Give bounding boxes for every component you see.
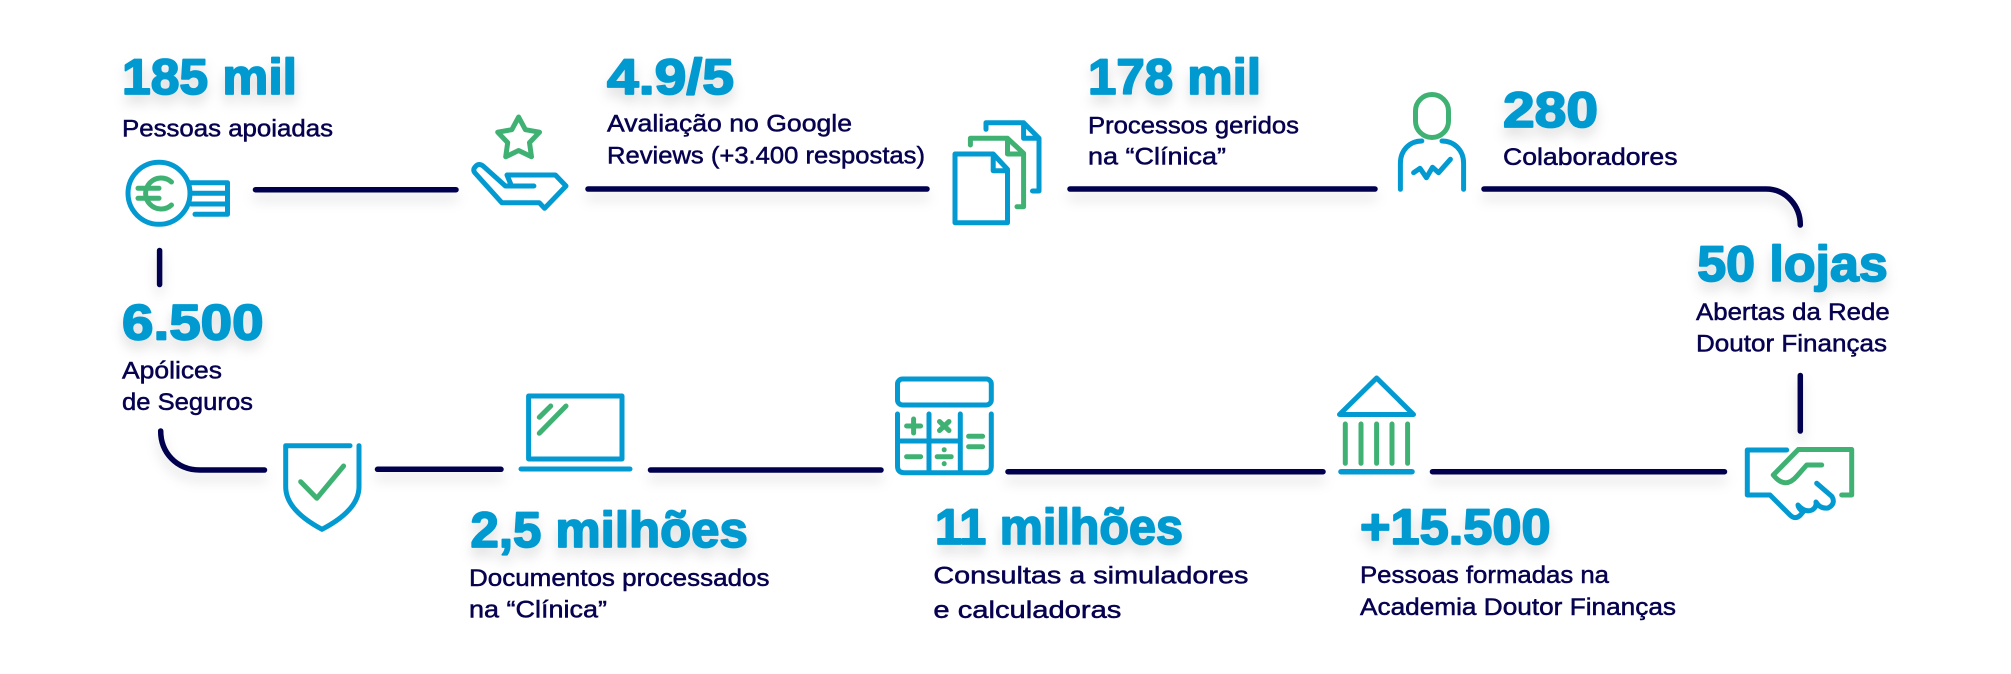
label: Consultas a simuladores: e calculadoras bbox=[933, 597, 1121, 624]
connector lines bbox=[160, 189, 1800, 472]
label: Apólices de Seguros: Apólices bbox=[122, 357, 222, 384]
heading: 4.9/5: 4.9/5 bbox=[607, 49, 734, 105]
icon: stacked documents bbox=[955, 123, 1039, 223]
heading: +15.500: +15.500 bbox=[1360, 499, 1551, 555]
stat: 50 lojas bbox=[1696, 236, 1890, 358]
icon: handshake bbox=[1747, 450, 1852, 518]
connector: staff to stores bbox=[1484, 189, 1800, 225]
label: Consultas a simuladores: Consultas a simuladores bbox=[933, 562, 1248, 589]
label: Pessoas apoiadas: Pessoas apoiadas bbox=[122, 116, 333, 143]
stat: 6.500 bbox=[122, 294, 264, 416]
connector: processes to staff bbox=[1070, 186, 1375, 192]
heading: 280: 280 bbox=[1503, 82, 1598, 138]
icon: hand with star bbox=[474, 117, 566, 208]
connector: shield to policies bbox=[161, 431, 264, 470]
heading: 2,5 milhões: 2,5 milhões bbox=[470, 502, 748, 558]
icon: laptop bbox=[521, 396, 630, 469]
connector: handshake to training bbox=[1432, 469, 1724, 474]
label: Documentos processados: Documentos processados bbox=[469, 565, 770, 592]
heading: 178 mil: 178 mil bbox=[1088, 49, 1261, 105]
icon: person with chart bbox=[1400, 94, 1464, 189]
stat: 11 milhões bbox=[933, 499, 1248, 624]
stat: 280 bbox=[1503, 82, 1678, 171]
heading: 185 mil: 185 mil bbox=[122, 49, 297, 105]
stat: 178 mil bbox=[1088, 49, 1299, 170]
stat: 4.9/5 bbox=[607, 49, 925, 169]
icon: bank bbox=[1340, 378, 1414, 472]
connector: reviews to processes bbox=[588, 186, 927, 192]
label: Pessoas formadas na Academia: Academia Doutor Finanças bbox=[1360, 594, 1676, 621]
label: Apólices de Seguros: de Seguros bbox=[122, 389, 253, 416]
label: Google Reviews: Avaliação no Google bbox=[607, 111, 852, 138]
label: Processos geridos: Processos geridos bbox=[1088, 112, 1299, 139]
label: Processos geridos: na “Clínica” bbox=[1088, 143, 1226, 170]
connector: laptop to shield bbox=[378, 467, 501, 472]
connector: stores to handshake bbox=[1798, 376, 1803, 431]
heading: 50 lojas: 50 lojas bbox=[1697, 236, 1888, 292]
icon: calculator bbox=[898, 379, 991, 473]
connector: bank to calculator bbox=[1008, 469, 1323, 474]
stat: 185 mil bbox=[122, 49, 333, 143]
label: Abertas da Rede Doutor Finanças: Abertas da Rede bbox=[1696, 299, 1890, 326]
heading: 6.500: 6.500 bbox=[122, 294, 264, 350]
label: Documentos processados: na “Clínica” bbox=[469, 596, 607, 623]
label: Pessoas formadas na Academia: Pessoas formadas na bbox=[1360, 562, 1610, 589]
label: Colaboradores: Colaboradores bbox=[1503, 144, 1678, 171]
connector: calculator to laptop bbox=[650, 467, 881, 473]
icon: euro coin stack bbox=[128, 162, 228, 224]
icon: shield with check bbox=[286, 446, 359, 529]
connector: people to reviews bbox=[256, 187, 456, 192]
label: Abertas da Rede Doutor Finanças: Doutor Finanças bbox=[1696, 331, 1887, 358]
connector: policies to people bbox=[157, 250, 162, 284]
stat: 2,5 milhões bbox=[469, 502, 770, 623]
label: Google Reviews: Reviews (+3.400 respostas) bbox=[607, 142, 925, 169]
heading: 11 milhões: 11 milhões bbox=[935, 499, 1183, 555]
stat: +15.500 bbox=[1360, 499, 1676, 621]
